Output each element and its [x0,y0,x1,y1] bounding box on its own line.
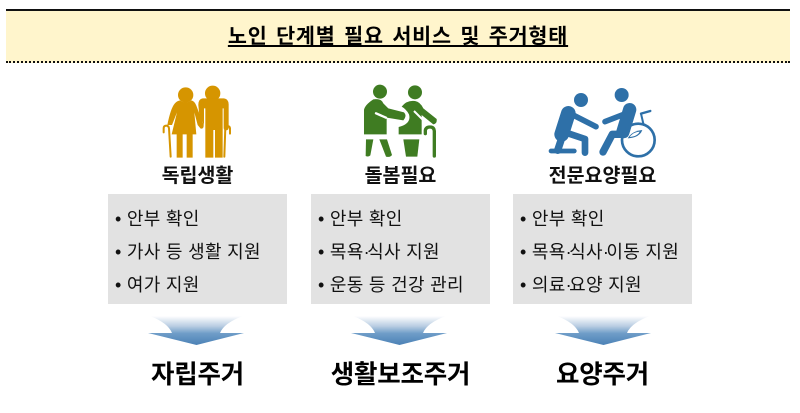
list item: • 가사 등 생활 지원 [115,242,261,262]
list item: • 안부 확인 [115,209,200,229]
label: 돌봄필요: 돌봄필요 [365,165,436,187]
arrow 3 [555,316,651,345]
panel: independent living services [108,194,287,304]
title: 노인 단계별 필요 서비스 및 주거형태 [228,25,568,48]
list item: • 목욕·식사 지원 [318,242,440,262]
list item: • 의료·요양 지원 [520,275,642,295]
list item: • 운동 등 건강 관리 [318,275,464,295]
label: 전문요양필요: 전문요양필요 [549,165,656,187]
list item: • 목욕·식사·이동 지원 [520,242,679,262]
arrow 2 [351,316,447,345]
title banner [6,9,790,63]
housing type: 자립주거: 자립주거 [151,361,244,389]
panel: care-needed services [311,194,490,304]
list item: • 여가 지원 [115,275,200,295]
housing type: 요양주거: 요양주거 [556,361,649,389]
arrow 1 [148,316,244,345]
list item: • 안부 확인 [318,209,403,229]
panel: professional care services [513,194,692,304]
housing type: 생활보조주거: 생활보조주거 [331,361,470,389]
list item: • 안부 확인 [520,209,605,229]
label: 독립생활: 독립생활 [162,165,233,187]
